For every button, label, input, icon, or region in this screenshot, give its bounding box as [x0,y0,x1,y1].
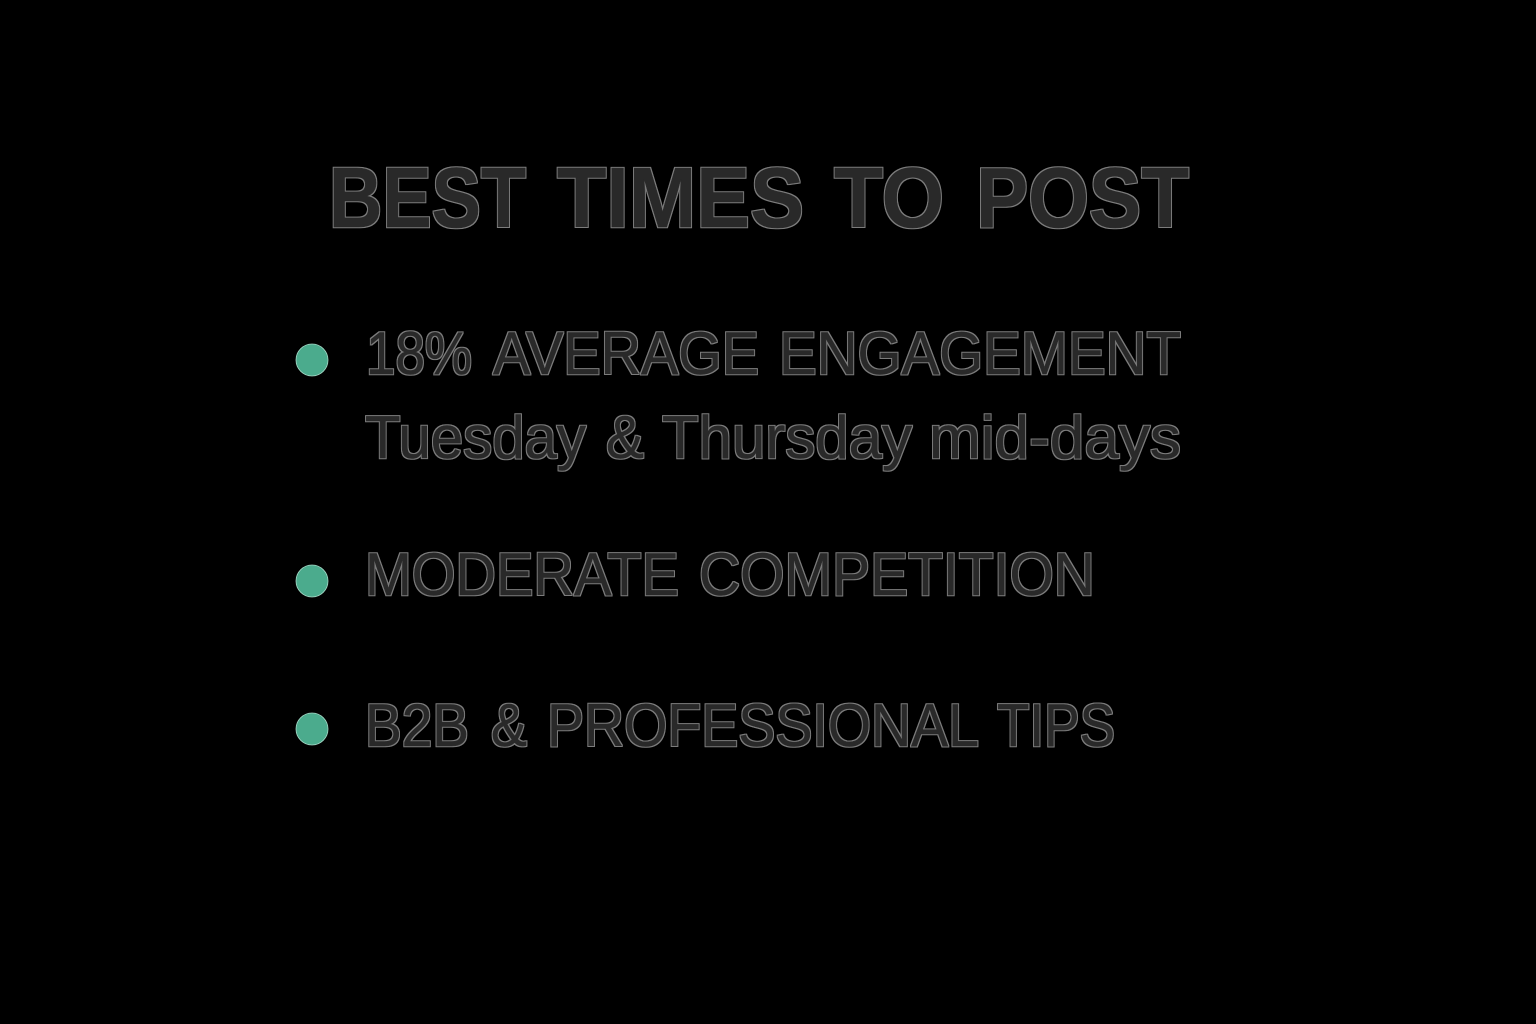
heading: B2B and professional tips: TIPS [997,692,1115,759]
title: BEST [329,151,526,246]
text: Tuesday and Thursday mid-days: & [606,404,644,471]
icon: green bullet 1 [296,344,328,376]
bullet group: B2B and professional tips [296,692,1115,759]
title: TIMES [557,151,804,246]
heading: B2B and professional tips: & [491,692,527,759]
heading: moderate competition: MODERATE [365,541,679,608]
icon: green bullet 2 [296,565,328,597]
icon: green bullet 3 [296,713,328,745]
title: POST [976,151,1189,246]
heading: B2B and professional tips: B2B [365,692,469,759]
bullet group: moderate competition [296,541,1095,608]
heading: 18% average engagement: ENGAGEMENT [779,320,1181,387]
bullet group: average engagement [296,320,1181,471]
text: Tuesday and Thursday mid-days: Tuesday [365,404,586,471]
text: Tuesday and Thursday mid-days: Thursday [662,404,912,471]
heading: 18% average engagement: AVERAGE [493,320,759,387]
heading: 18% average engagement: 18% [366,320,472,387]
title: TO [834,151,944,246]
heading: moderate competition: COMPETITION [699,541,1095,608]
heading: B2B and professional tips: PROFESSIONAL [547,692,978,759]
text: Tuesday and Thursday mid-days: mid-days [929,404,1181,471]
